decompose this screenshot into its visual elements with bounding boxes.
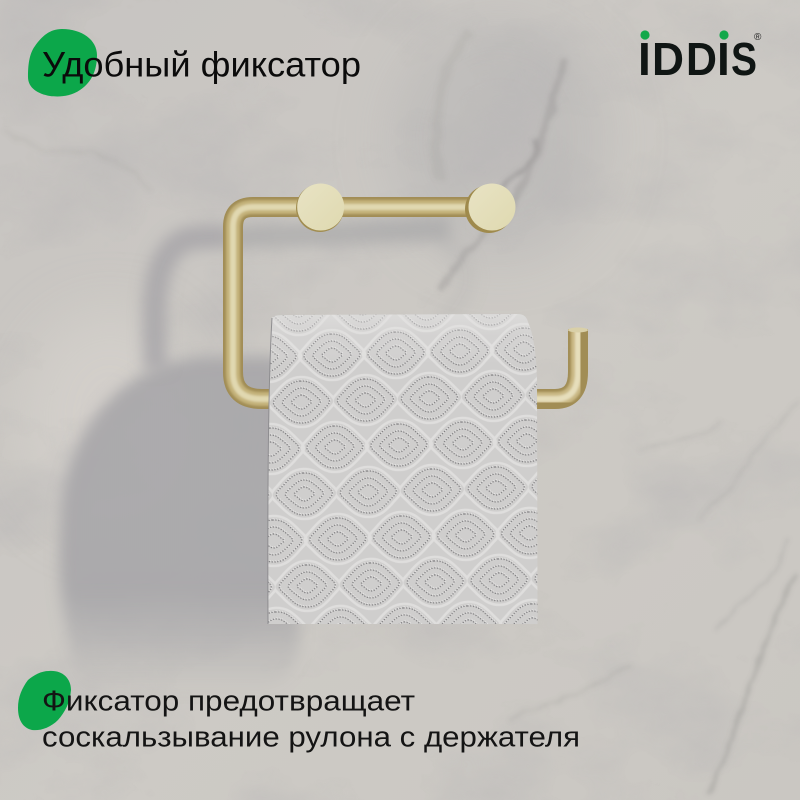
logo: IDDIS — [638, 30, 762, 85]
description text: соскальзывание рулона с держателя — [42, 722, 580, 754]
green blob small — [18, 671, 71, 730]
holder arm — [233, 207, 500, 399]
logo: IDDIS: D — [652, 33, 684, 85]
logo: IDDIS: D — [686, 33, 717, 85]
logo: IDDIS: I — [717, 33, 730, 85]
shadows of holder and roll — [59, 228, 466, 695]
holder hook — [530, 328, 588, 399]
heading — [28, 29, 361, 96]
description — [18, 671, 580, 754]
toilet paper roll — [268, 314, 538, 624]
holder: gold bracket — [233, 184, 588, 399]
logo: IDDIS: I — [638, 33, 651, 85]
description text: Фиксатор предотвращает — [42, 686, 415, 718]
logo: IDDIS: ® — [754, 32, 762, 43]
logo: IDDIS: S — [731, 33, 757, 85]
mounting disc left — [296, 184, 344, 232]
green blob — [28, 29, 97, 96]
mounting disc right — [465, 184, 516, 233]
title text: Удобный фиксатор — [42, 46, 361, 84]
